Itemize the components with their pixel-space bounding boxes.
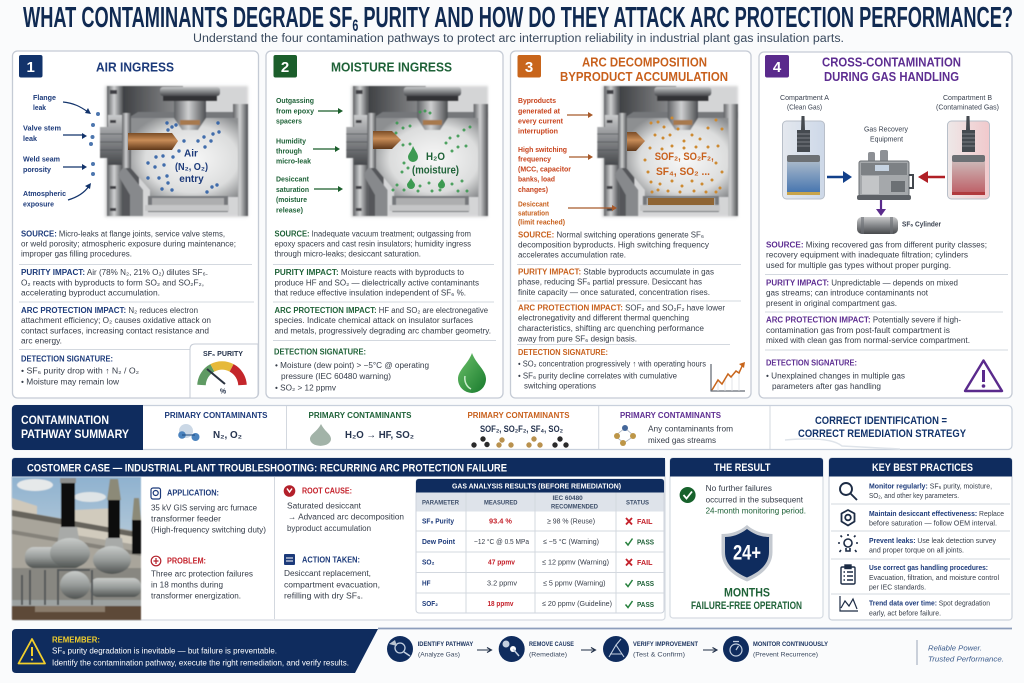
icon: leak bulb [838, 534, 858, 552]
callouts: byproduct sources: interruption [518, 126, 558, 136]
table: gas analysis results: STATUS [626, 500, 650, 506]
block: problem: in 18 months during [151, 580, 223, 590]
block: root cause [284, 485, 404, 533]
panel: arc decomposition: away from pure SF₆ design basis. [518, 334, 637, 344]
panel: air ingress [12, 51, 258, 398]
step: monitor continuously: MONITOR CONTINUOUSLY [753, 641, 828, 648]
case header [12, 458, 665, 476]
panel: arc decomposition: electronegativity and different thermal quenching [518, 314, 689, 322]
gas recovery machine [857, 150, 913, 200]
block: root cause: → Advanced arc decomposition [288, 512, 404, 522]
icon: clipboard [841, 565, 855, 584]
callouts: moisture sources: Desiccant [276, 174, 310, 184]
row: HF: PASS [637, 579, 654, 588]
panel: air ingress: O₂ reacts with byproducts to form SO₂ and SO₂F₂, [21, 278, 204, 288]
callouts: byproduct sources: Byproducts [518, 96, 556, 105]
icon: warning triangle [965, 360, 1002, 391]
practice: trend data: Trend data over time: Spot degradation [869, 598, 990, 608]
panel: customer case [12, 458, 665, 620]
callouts: leak sources: leak [33, 103, 46, 112]
summary statement [785, 415, 967, 449]
callouts: leak sources [23, 93, 98, 208]
block: root cause: Saturated desiccant [287, 502, 362, 510]
icon: gear [842, 510, 854, 526]
block: root cause: byproduct accumulation [287, 524, 371, 533]
icon: trend chart [840, 596, 858, 611]
panel: arc decomposition: phase, reducing SF₆ partial pressure. Desiccant has [518, 278, 702, 286]
row: SO2: FAIL [637, 558, 653, 567]
number badge 3: 3 [525, 59, 533, 76]
icon: problem [151, 556, 161, 566]
number badge 4: 4 [773, 59, 782, 76]
row: SOF2 [422, 599, 654, 609]
heading: air ingress: AIR INGRESS [96, 60, 174, 74]
row: SOF2: PASS [637, 600, 654, 609]
months label: FAILURE-FREE OPERATION [691, 600, 802, 612]
title: 6 [352, 16, 358, 35]
panel: air ingress: • SF₆ purity drop with ↑ N₂ / O₂ [21, 366, 139, 376]
panel: air ingress: arc energy. [21, 336, 62, 346]
number badge 4 [765, 55, 789, 78]
panel: cross-contamination: parameters after gas handling [772, 382, 881, 391]
panel: air ingress: attachment efficiency; O₂ causes oxidative attack on [21, 316, 211, 325]
callouts: byproduct sources: changes) [518, 185, 549, 194]
block: problem: Three arc protection failures [151, 570, 253, 578]
arrow [581, 648, 596, 652]
panel: moisture ingress: produce HF and SO₂ — dielectrically active contaminants [274, 278, 479, 288]
panel: arc decomposition: • SF₆ purity decline correlates with cumulative [518, 372, 678, 380]
rule under remember banner [378, 628, 1012, 630]
panel: cross-contamination: mixed with clean gas from normal-service compartment. [766, 336, 970, 345]
summary label [12, 405, 143, 450]
callouts: byproduct sources: (limit reached) [518, 218, 566, 226]
cutaway chamber illustration: Air [184, 148, 198, 160]
panel: moisture ingress: and metals, progressively degrading arc chamber geometry. [274, 326, 491, 336]
result statement: occurred in the subsequent [706, 496, 804, 504]
step: verify improvement: (Test & Confirm) [633, 652, 685, 658]
summary label: PATHWAY SUMMARY [21, 427, 129, 441]
contaminants: mixed streams: PRIMARY CONTAMINANTS [620, 411, 722, 420]
callouts: byproduct sources: saturation [518, 208, 549, 218]
callouts: byproduct sources: frequency [518, 154, 551, 164]
number badge 2: 2 [281, 59, 289, 76]
text block: purity impact: PURITY IMPACT: Stable byproducts accumulate in gas [518, 268, 714, 276]
practice: maintain desiccant [842, 509, 1004, 528]
diagram: gas handling flow: Gas Recovery [864, 126, 908, 134]
icon: magnifier on navy [387, 636, 413, 662]
summary statement: CORRECT IDENTIFICATION = [815, 415, 947, 427]
callouts: moisture sources: spacers [276, 116, 302, 126]
table: gas analysis results: RECOMMENDED [551, 504, 598, 510]
tagline: Reliable Power. [928, 644, 982, 652]
step: identify pathway [387, 636, 474, 662]
cutaway chamber illustration [597, 86, 738, 217]
text block: arc protection impact: ARC PROTECTION IMPACT: Potentially severe if high- [766, 316, 961, 324]
banner: remember [12, 629, 378, 673]
panel: contamination pathway summary [12, 405, 1012, 450]
block: action taken: compartment evacuation, [284, 580, 380, 590]
panel: air ingress: improper gas filling procedures. [21, 250, 132, 258]
practice: gas handling: Evacuation, filtration, and moisture control [869, 573, 999, 582]
callouts: byproduct sources: High switching [518, 145, 567, 154]
row: SO2: 47 ppmv [488, 558, 516, 566]
block: action taken: refilling with dry SF₆. [284, 592, 363, 600]
cutaway chamber illustration [100, 86, 248, 217]
subtitle: Understand the four contamination pathways to protect arc interruption reliability in industrial plant gas insulation parts. [193, 33, 844, 45]
row: SOF2: 18 ppmv [488, 599, 514, 608]
panel: cross-contamination: gas streams; can introduce contaminants not [766, 288, 929, 298]
row: HF: ≤ 5 ppmv (Warning) [543, 578, 606, 588]
panel: arc decomposition: • SO₂ concentration progressively ↑ with operating hours [518, 360, 706, 368]
panel: air ingress: or weld porosity; atmospheric exposure during maintenance; [21, 240, 236, 248]
icon: gauge on navy [603, 636, 629, 662]
heading: arc decomposition byproduct accumulation: ARC DECOMPOSITION [582, 54, 707, 70]
callouts: moisture sources: through [276, 146, 302, 156]
practice: gas handling: per IEC standards. [869, 582, 926, 592]
panel: arc decomposition: characteristics, shifting arc quenching performance [518, 324, 705, 333]
block: application [151, 488, 266, 534]
practice: trend data [840, 596, 990, 618]
result statement [706, 484, 806, 516]
panel: cross-contamination: present in original compartment gas. [766, 299, 897, 308]
step: identify pathway: (Analyze Gas) [418, 652, 460, 658]
text block: detection signature: DETECTION SIGNATURE: [274, 348, 366, 356]
callouts: leak sources: porosity [23, 165, 51, 174]
callouts: moisture sources: release) [276, 206, 304, 214]
months label [691, 586, 802, 612]
panel: air ingress: accelerating byproduct accumulation. [21, 288, 160, 298]
SF6 cylinder [857, 217, 941, 234]
cutaway chamber illustration: entry [179, 174, 204, 185]
block: application: APPLICATION: [167, 488, 219, 498]
SF6 cylinder: SF₆ Cylinder [902, 220, 941, 228]
result statement: 24-month monitoring period. [706, 506, 806, 516]
arrow [703, 648, 717, 652]
banner: remember: SF₆ purity degradation is inevitable — but failure is preventable. [52, 646, 277, 656]
callouts: leak sources: Weld seam [23, 154, 60, 164]
practice: prevent leaks: Prevent leaks: Use leak detection survey [869, 536, 996, 545]
heading: cross-contamination during gas handling [822, 54, 961, 84]
cutaway chamber illustration [346, 86, 488, 217]
table: gas analysis results [416, 479, 664, 613]
process steps [387, 636, 828, 662]
callouts: moisture sources [276, 96, 343, 214]
practice: prevent leaks [838, 534, 996, 554]
contaminants: moisture: H₂O → HF, SO₂ [345, 430, 414, 441]
panel: arc decomposition: decomposition byproducts. High switching frequency [518, 240, 709, 250]
panel: moisture ingress: through micro-leaks; desiccant saturation. [274, 250, 421, 258]
callouts: leak sources: leak [23, 134, 37, 143]
panel: arc decomposition: finite capacity — once saturated, concentration rises. [518, 288, 710, 297]
text block: purity impact: PURITY IMPACT: Unpredictable — depends on mixed [766, 278, 958, 288]
contaminants: moisture [308, 411, 414, 446]
gauge: SF6 purity [190, 344, 258, 398]
block: problem [151, 556, 253, 600]
panel: cross-contamination: contamination gas from post-fault compartment is [766, 326, 950, 335]
heading: arc decomposition byproduct accumulation: BYPRODUCT ACCUMULATION [560, 69, 728, 84]
step: remove cause: (Remediate) [529, 652, 567, 658]
flow arrows [827, 171, 945, 216]
callouts: byproduct sources [518, 96, 617, 226]
text block: detection signature: DETECTION SIGNATURE: [518, 348, 608, 357]
panel: air ingress: • Moisture may remain low [21, 378, 119, 386]
gauge: SF6 purity: SF₆ PURITY [203, 351, 243, 358]
icon: warning triangle [18, 639, 45, 664]
block: application: 35 kV GIS serving arc furnace [151, 504, 258, 512]
text block: detection signature: DETECTION SIGNATURE: [21, 354, 113, 364]
callouts: moisture sources: (moisture [276, 195, 307, 204]
block: application: (High-frequency switching duty) [151, 526, 266, 534]
callouts: byproduct sources: Desiccant [518, 200, 550, 208]
table: gas analysis results: IEC 60480 [552, 495, 583, 502]
tagline [917, 640, 1004, 665]
result header: THE RESULT [714, 462, 771, 474]
panel: cross-contamination [759, 52, 1012, 398]
cutaway chamber illustration: (moisture) [412, 164, 459, 176]
diagram: gas handling flow: Compartment A [780, 95, 829, 102]
row: SO2: ≤ 12 ppmv (Warning) [542, 558, 609, 566]
text block: arc protection impact: ARC PROTECTION IMPACT: HF and SO₂ are electronegative [274, 306, 489, 315]
banner: remember: REMEMBER: [52, 636, 100, 644]
photo: GIS substation [12, 477, 141, 620]
row: dew point: ≤ −5 °C (Warning) [543, 537, 599, 546]
compartment B [948, 116, 990, 199]
block: root cause: ROOT CAUSE: [302, 486, 352, 496]
panel: arc decomposition: accelerates accumulation rate. [518, 250, 626, 260]
block: problem: transformer energization. [151, 592, 241, 600]
step: monitor continuously [723, 636, 828, 662]
row: dew point: −12 °C @ 0.5 MPa [474, 537, 530, 546]
row: SF6 purity: FAIL [637, 517, 653, 526]
shield: 24+ months [722, 525, 772, 582]
row: SF6 purity: ≥ 98 % (Reuse) [547, 516, 595, 526]
shield: 24+ months: 24+ [733, 542, 761, 564]
row: SF6 purity: SF₆ Purity [422, 516, 455, 526]
callouts: byproduct sources: banks, load [518, 174, 555, 184]
icon: molecule on navy [499, 636, 525, 662]
icon: root cause [284, 485, 295, 497]
block: action taken: Desiccant replacement, [284, 569, 371, 578]
heading: cross-contamination during gas handling: DURING GAS HANDLING [824, 69, 959, 84]
callouts: moisture sources: from epoxy [276, 106, 314, 116]
panel: the result [670, 458, 823, 618]
cutaway chamber illustration: SOF₂, SO₂F₂, [655, 151, 714, 163]
contaminants: air: PRIMARY CONTAMINANTS [164, 411, 268, 420]
table: gas analysis results: PARAMETER [422, 500, 459, 506]
practice: maintain desiccant: before saturation — follow OEM interval. [869, 518, 997, 528]
icon: application [151, 488, 160, 499]
panel: moisture ingress: • Moisture (dew point) > −5°C @ operating [275, 361, 429, 370]
contaminants: arc byproducts: SOF₂, SO₂F₂, SF₄, SO₂ [480, 424, 563, 434]
cutaway chamber illustration: (N₂, O₂) [175, 162, 208, 173]
contaminants: mixed streams [614, 411, 733, 446]
callouts: leak sources: exposure [23, 200, 54, 208]
table: gas analysis results: GAS ANALYSIS RESULTS (BEFORE REMEDIATION) [452, 482, 621, 490]
callouts: moisture sources: Humidity [276, 136, 306, 146]
text block: arc protection impact: ARC PROTECTION IMPACT: N₂ reduces electron [21, 306, 198, 315]
tagline: Trusted Performance. [928, 654, 1004, 664]
icon: water drop [458, 353, 486, 393]
row: SF6 purity: 93.4 % [489, 516, 512, 526]
icon: action taken [284, 554, 295, 565]
row: dew point: PASS [637, 538, 654, 546]
callouts: byproduct sources: every current [518, 116, 564, 126]
table: gas analysis results: MEASURED [484, 500, 518, 506]
panel: moisture ingress: epoxy spacers and cast resin insulators; humidity ingress [274, 240, 471, 248]
row: SOF2: SOF₂ [422, 599, 438, 608]
row: SO2 [422, 558, 653, 567]
row: HF [422, 578, 654, 588]
number badge 1 [19, 55, 42, 78]
diagram: gas handling flow: Equipment [870, 136, 903, 144]
heading: cross-contamination during gas handling: CROSS-CONTAMINATION [822, 54, 961, 70]
step: remove cause [499, 636, 574, 662]
step: identify pathway: IDENTIFY PATHWAY [418, 641, 474, 648]
panel: cross-contamination: • Unexplained changes in multiple gas [766, 372, 905, 380]
contaminants: mixed streams: Any contaminants from [648, 424, 733, 434]
callouts: byproduct sources: (MCC, capacitor [518, 164, 571, 174]
heading: moisture ingress: MOISTURE INGRESS [331, 60, 452, 74]
practice: gas handling: Use correct gas handling procedures: [869, 563, 988, 572]
panel: cross-contamination: used for multiple gas types without proper purging. [766, 261, 951, 270]
panel: moisture ingress: pressure (IEC 60480 warning) [281, 372, 391, 381]
text block: detection signature: DETECTION SIGNATURE: [766, 358, 857, 368]
panel: moisture ingress: that reduce effective insulation independent of SF₆ %. [274, 288, 466, 298]
result statement: No further failures [706, 484, 772, 493]
text block: purity impact: PURITY IMPACT: Air (78% N₂, 21% O₂) dilutes SF₆. [21, 268, 208, 277]
summary statement: CORRECT REMEDIATION STRATEGY [798, 428, 967, 440]
practice: monitor regularly: SO₂, and other key parameters. [869, 491, 959, 500]
row: dew point: Dew Point [422, 537, 455, 546]
step: monitor continuously: (Prevent Recurrence) [753, 652, 818, 658]
text block: arc protection impact: ARC PROTECTION IMPACT: SOF₂ and SO₂F₂ have lower [518, 304, 725, 312]
panel: cross-contamination: recovery equipment with inadequate filtration; cylinders [766, 250, 968, 260]
text block: source: SOURCE: Micro-leaks at flange joints, service valve stems, [21, 230, 225, 238]
heading: arc decomposition byproduct accumulation [560, 54, 728, 84]
months label: MONTHS [724, 586, 770, 600]
icon: check [680, 487, 696, 503]
panel: arc decomposition [510, 51, 751, 398]
case header: COSTOMER CASE — INDUSTRIAL PLANT TROUBLESHOOTING: RECURRING ARC PROTECTION FAILURE [27, 462, 507, 474]
contaminants: moisture: PRIMARY CONTAMINANTS [308, 411, 412, 420]
practice: gas handling [841, 563, 999, 592]
callouts: leak sources: Flange [33, 93, 56, 102]
row: HF: 3.2 ppmv [487, 578, 517, 588]
best practices header: KEY BEST PRACTICES [872, 462, 973, 474]
best practices header [829, 458, 1012, 476]
callouts: moisture sources: saturation [276, 185, 309, 194]
practice: monitor regularly: Monitor regularly: SF₆ purity, moisture, [869, 482, 992, 490]
callouts: byproduct sources: generated at [518, 106, 561, 116]
panel: arc decomposition: switching operations [524, 382, 596, 390]
row: dew point [422, 537, 654, 546]
step: verify improvement [603, 636, 699, 662]
diagram: gas handling flow: (Clean Gas) [787, 104, 822, 112]
row: SO2: SO₂ [422, 558, 434, 566]
diagram: gas handling flow: Compartment B [943, 95, 992, 102]
contaminants: air [164, 411, 268, 441]
text block: source: SOURCE: Normal switching operations generate SF₆ [518, 230, 704, 240]
practice: maintain desiccant: Maintain desiccant effectiveness: Replace [869, 509, 1004, 518]
number badge 3 [518, 55, 541, 78]
icon: magnifier [840, 483, 857, 500]
summary label: CONTAMINATION [21, 413, 109, 427]
step: remove cause: REMOVE CAUSE [529, 641, 574, 648]
block: action taken [284, 554, 380, 600]
cutaway chamber illustration: SF₄, SO₂ ... [656, 166, 710, 178]
callouts: leak sources: Valve stem [23, 124, 61, 132]
diagram: gas handling flow [780, 95, 999, 234]
practice: monitor regularly [840, 482, 992, 500]
panel: moisture ingress: • SO₂ > 12 ppmv [275, 384, 336, 392]
title: WHAT CONTAMINANTS DEGRADE SF [23, 2, 547, 34]
number badge 2 [274, 55, 297, 78]
block: application: transformer feeder [151, 514, 221, 524]
step: verify improvement: VERIFY IMPROVEMENT [633, 641, 699, 648]
result header [670, 458, 823, 476]
contaminants: arc byproducts [468, 411, 570, 445]
panel: moisture ingress: species. Indicate chemical attack on insulator surfaces [274, 316, 473, 325]
contaminants: air: N₂, O₂ [213, 430, 242, 441]
row: SOF2: ≤ 20 ppmv (Guideline) [542, 599, 612, 608]
arrow [477, 648, 492, 652]
icon: stopwatch on navy [723, 636, 749, 662]
block: problem: PROBLEM: [167, 556, 206, 566]
row: HF: HF [422, 578, 431, 588]
text block: source: SOURCE: Mixing recovered gas from different purity classes; [766, 240, 987, 250]
banner: remember: Identify the contamination pathway, execute the right remediation, and verify results. [52, 658, 349, 668]
diagram: gas handling flow: (Contaminated Gas) [936, 104, 999, 112]
practice: trend data: early, act before failure. [869, 608, 941, 618]
block: action taken: ACTION TAKEN: [302, 556, 360, 564]
row: SF6 purity [422, 516, 653, 526]
callouts: leak sources: Atmospheric [23, 189, 66, 198]
panel: key best practices [829, 458, 1012, 620]
callouts: moisture sources: micro-leak [276, 156, 311, 166]
callouts: moisture sources: Outgassing [276, 96, 314, 105]
practice: prevent leaks: and proper torque on all joints. [869, 546, 964, 554]
number badge 1: 1 [27, 59, 35, 76]
gauge: SF6 purity: % [220, 388, 227, 396]
chart: rising trend [711, 362, 745, 391]
contaminants: arc byproducts: PRIMARY CONTAMINANTS [468, 411, 570, 420]
contaminants: mixed streams: mixed gas streams [648, 436, 716, 445]
cutaway chamber illustration: H₂O [426, 151, 445, 163]
panel: moisture ingress [266, 51, 503, 398]
panel: air ingress: contact surfaces, increasing contact resistance and [21, 326, 209, 336]
text block: source: SOURCE: Inadequate vacuum treatment; outgassing from [274, 230, 471, 238]
text block: purity impact: PURITY IMPACT: Moisture reacts with byproducts to [274, 268, 465, 277]
compartment A [782, 116, 824, 199]
